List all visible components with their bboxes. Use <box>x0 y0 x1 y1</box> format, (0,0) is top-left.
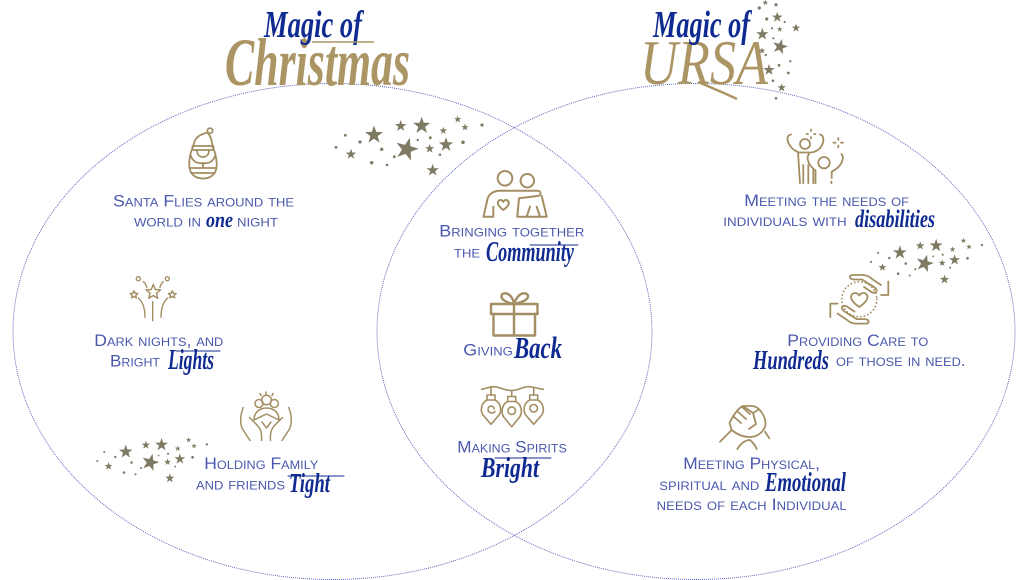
text: Santa flies around the world in one night: world in <box>134 213 201 231</box>
title: Magic of URSA <box>640 4 769 99</box>
venn circle: Christmas <box>13 84 652 580</box>
icon: hands holding family <box>241 392 291 440</box>
text: Making spirits bright <box>457 438 567 484</box>
text: Dark nights and bright lights <box>94 332 224 376</box>
text: Meeting physical, spiritual and emotional needs: Meeting Physical, <box>683 455 820 473</box>
icon: clasped hands <box>720 406 769 449</box>
text: Holding family and friends tight <box>196 455 344 498</box>
text: Santa flies around the world in one night <box>113 193 294 232</box>
text: Bringing together the community: Bringing together <box>439 223 585 241</box>
text: Dark nights and bright lights: Lights <box>167 345 214 376</box>
text: Holding family and friends tight: and friends <box>196 475 285 493</box>
venn circle: URSA <box>377 84 1015 580</box>
icon: santa <box>189 128 217 178</box>
text: Providing care to hundreds of those in need: of those in need. <box>836 352 966 370</box>
text: Bringing together the community: the <box>454 243 480 261</box>
text: Providing care to hundreds of those in need: Providing Care to <box>787 332 928 350</box>
text: Making spirits bright: Bright <box>480 452 540 484</box>
icon: caring hands with heart <box>830 275 888 324</box>
title: Magic of Christmas: Magic of <box>263 4 364 46</box>
icon: two friends embracing <box>484 171 547 217</box>
stars: lower left <box>96 437 208 482</box>
text: Dark nights and bright lights: Dark nights, and <box>94 332 224 350</box>
text: Bringing together the community: Community <box>486 236 574 268</box>
text: Holding family and friends tight: Holding Family <box>204 455 318 473</box>
text: Santa flies around the world in one night: one <box>206 207 233 232</box>
stars: top right by URSA title <box>756 0 800 100</box>
icon: gift box <box>491 293 538 336</box>
title: Magic of URSA: Magic of <box>652 4 752 46</box>
stars: right circle <box>870 238 983 283</box>
text: Meeting the needs of individuals with disabilities: individuals with <box>723 212 847 230</box>
text: Meeting the needs of individuals with disabilities <box>723 192 935 233</box>
text: Santa flies around the world in one night: Santa Flies around the <box>113 193 294 211</box>
text: Meeting physical, spiritual and emotional needs: spiritual and <box>659 476 760 494</box>
text: Santa flies around the world in one night: night <box>237 213 279 231</box>
text: Meeting physical, spiritual and emotional needs <box>657 455 847 514</box>
text: Providing care to hundreds of those in need <box>752 332 966 375</box>
text: Giving back: Giving <box>463 342 513 360</box>
text: Dark nights and bright lights: Bright <box>110 353 161 371</box>
text: Making spirits bright: Making Spirits <box>457 438 567 456</box>
text: Providing care to hundreds of those in need: Hundreds <box>752 345 829 375</box>
stars: upper left circle <box>335 116 484 176</box>
text: Giving back: Back <box>513 330 562 365</box>
text: Meeting physical, spiritual and emotional needs: Emotional <box>764 467 846 497</box>
icon: two people raising arms <box>788 130 843 183</box>
text: Giving back <box>463 330 562 365</box>
icon: fireworks <box>130 277 176 321</box>
text: Meeting the needs of individuals with disabilities: disabilities <box>855 206 935 233</box>
title: Magic of URSA: URSA <box>640 27 769 98</box>
title: Magic of Christmas <box>225 4 410 100</box>
text: Meeting the needs of individuals with disabilities: Meeting the needs of <box>744 192 909 210</box>
text: Holding family and friends tight: Tight <box>289 468 331 498</box>
text: Meeting physical, spiritual and emotional needs: needs of each Individual <box>657 496 847 514</box>
title: Magic of Christmas: Christmas <box>225 24 410 100</box>
text: Bringing together the community <box>439 223 585 268</box>
icon: string of bulbs <box>481 387 543 427</box>
